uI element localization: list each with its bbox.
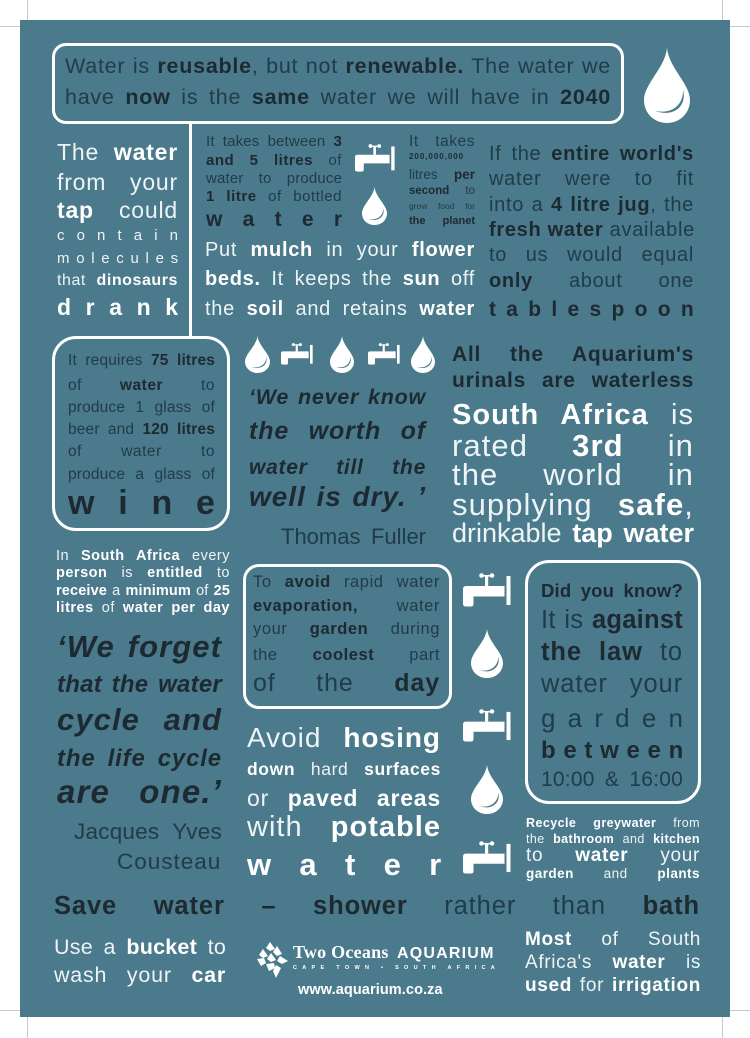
text: litres to grow food: 200,000,000 (409, 152, 464, 161)
icon: tap (463, 841, 510, 874)
quote: Jacques Yves Cousteau: Jacques Yves (74, 819, 222, 844)
text: avoid hosing (246, 722, 469, 882)
text: water dinosaurs drank: from your (57, 169, 178, 195)
text: bucket to wash car: wash your car (54, 963, 226, 987)
text: most water used for irrigation (525, 929, 701, 996)
text: water dinosaurs drank (57, 139, 193, 320)
text: South Africa rated 3rd: supplying safe, (452, 487, 694, 522)
text: waterless urinals: urinals are waterless (452, 369, 694, 392)
text: bucket to wash car: Use a bucket to (54, 935, 226, 959)
text: avoid hosing: Avoid hosing (247, 722, 441, 753)
text: beer and wine litres: wine (68, 484, 239, 522)
quote: Jacques Yves Cousteau: ‘We forget (57, 629, 222, 664)
text: logo wordmark (293, 942, 495, 962)
text: reusable not renewable: Water is reusable, but not renewable. The water we (65, 54, 611, 78)
text: water dinosaurs drank: tap could (57, 197, 178, 223)
text: did you know garden law: 10:00 & 16:00 (541, 768, 683, 791)
text: avoid evaporation: To avoid rapid water (253, 573, 440, 591)
text: bottled water litres (206, 133, 362, 231)
text: shower rather than bath: Save water – shower rather than bath (54, 892, 700, 920)
icon: tap (281, 343, 313, 365)
quote: Thomas Fuller: Thomas Fuller (281, 524, 426, 549)
text: water dinosaurs drank: drank (57, 294, 193, 320)
icon: large water drop (644, 48, 690, 123)
text: waterless urinals: All the Aquarium's (452, 343, 694, 366)
text: 4 litre jug tablespoon: tablespoon (489, 298, 704, 321)
text: entitled to 25 litres (56, 548, 230, 616)
text: bottled water litres: water to produce (206, 170, 342, 187)
text: water dinosaurs drank: The water (57, 139, 178, 165)
text: litres to grow food: grow food for (409, 201, 475, 211)
icon row: drops and taps (245, 336, 435, 373)
text: avoid hosing: or paved areas (247, 785, 441, 811)
text: bottled water litres: It takes between 3 (206, 133, 342, 150)
text: beer and wine litres: of water to (68, 377, 215, 394)
text: South Africa rated 3rd: drinkable tap water (452, 518, 694, 548)
icon: water drop (362, 187, 387, 225)
text: water dinosaurs drank: that dinosaurs (57, 272, 178, 289)
text: did you know garden law: garden (541, 703, 695, 733)
text: reusable not renewable (65, 54, 611, 109)
text: website url: www.aquarium.co.za (298, 982, 443, 998)
text: recycle greywater: garden and plants (526, 866, 700, 881)
text: avoid evaporation (253, 573, 440, 697)
text: bottled water litres: water (206, 208, 362, 231)
text: recycle greywater: to water your (526, 845, 700, 866)
text: beer and wine litres: of water to (68, 443, 215, 460)
text: avoid hosing: with potable (247, 811, 441, 843)
text: did you know garden law (541, 580, 695, 791)
text: bottled water litres: 1 litre of bottled (206, 188, 342, 205)
text: litres to grow food: litres per (409, 167, 475, 182)
text: most water used for irrigation: Most of South (525, 929, 701, 950)
text: South Africa rated 3rd: rated 3rd in (452, 428, 694, 463)
text: avoid evaporation: the coolest part (253, 646, 440, 664)
text: litres to grow food: It takes (409, 133, 475, 150)
panel: did you know box (525, 560, 701, 804)
text: 4 litre jug tablespoon: water were to fit (489, 168, 694, 190)
text: mulch flower beds: beds. It keeps the sun off (205, 268, 475, 290)
text: South Africa rated 3rd (452, 399, 694, 548)
text: waterless urinals (452, 343, 694, 392)
text: entitled to 25 litres: litres of water per day (56, 600, 230, 616)
quote: Jacques Yves Cousteau: cycle and (57, 702, 222, 737)
icon: water drop (471, 629, 503, 678)
icon: drop (411, 336, 435, 373)
text: avoid hosing: water (247, 847, 469, 882)
logo: Two Oceans Aquarium (257, 942, 500, 998)
text: entitled to 25 litres: In South Africa every (56, 548, 230, 564)
text: beer and wine litres: It requires 75 litres (68, 352, 215, 369)
quote: Thomas Fuller: the worth of (249, 417, 426, 445)
text: South Africa rated 3rd: the world in (452, 457, 694, 492)
text: litres to grow food (409, 133, 475, 227)
text: recycle greywater: the bathroom and kitchen (526, 832, 700, 846)
text: 4 litre jug tablespoon: If the entire world's (489, 143, 694, 165)
text: litres to grow food: the planet (409, 215, 475, 227)
text: most water used for irrigation: used for irrigation (525, 975, 701, 996)
text: 4 litre jug tablespoon (489, 143, 704, 321)
text: avoid evaporation: of the day (253, 669, 440, 697)
text: beer and wine litres: produce a glass of (68, 466, 215, 483)
text: did you know garden law: Did you know? (541, 580, 683, 601)
text: did you know garden law: the law to (541, 638, 683, 666)
icon: drop (330, 336, 354, 373)
icon: tap (463, 709, 510, 742)
panel: beer and wine box (52, 336, 230, 531)
text: mulch flower beds (205, 239, 475, 320)
text: recycle greywater: Recycle greywater from (526, 816, 700, 830)
text: most water used for irrigation: Africa's water is (525, 952, 701, 973)
text: mulch flower beds: Put mulch in your flower (205, 239, 475, 261)
text: water dinosaurs drank: contain (57, 227, 190, 244)
quote: Jacques Yves Cousteau: are one.’ (57, 773, 222, 810)
quote: Thomas Fuller (249, 385, 428, 549)
text: water dinosaurs drank: molecules (57, 250, 185, 267)
text: 4 litre jug tablespoon: into a 4 litre jug, the (489, 194, 694, 216)
quote: Thomas Fuller: water till the (249, 456, 426, 479)
text: avoid hosing: down hard surfaces (247, 759, 441, 779)
text: did you know garden law: between (541, 737, 691, 764)
text: beer and wine litres: beer and 120 litres (68, 421, 215, 438)
quote: Jacques Yves Cousteau (57, 629, 223, 874)
text: logo wordmark: AQUARIUM (397, 945, 495, 962)
icon: drop (245, 336, 270, 373)
icon: tap (355, 144, 395, 172)
quote: Jacques Yves Cousteau: the life cycle (57, 745, 222, 772)
vertical divider line (189, 123, 192, 337)
text: bucket to wash car (54, 935, 226, 987)
text: reusable not renewable: have now is the same water we will have in 2040 (65, 85, 611, 109)
text: entitled to 25 litres: person is entitled to (56, 565, 230, 581)
text: 4 litre jug tablespoon: only about one (489, 270, 694, 292)
text: bottled water litres: and 5 litres of (206, 152, 342, 169)
text: did you know garden law: It is against (541, 606, 683, 634)
text: recycle greywater (526, 816, 700, 881)
quote: Thomas Fuller: ‘We never know (249, 385, 426, 409)
text: litres to grow food: second to (409, 185, 475, 197)
text: logo wordmark: Two Oceans (293, 942, 389, 962)
text: South Africa rated 3rd: South Africa is (452, 399, 694, 431)
text: mulch flower beds: the soil and retains water (205, 298, 475, 320)
text: avoid evaporation: evaporation, water (253, 597, 440, 615)
text: 4 litre jug tablespoon: to us would equal (489, 244, 694, 266)
icon: tap (368, 343, 400, 365)
panel: evaporation box (243, 564, 452, 709)
text: 4 litre jug tablespoon: fresh water available (489, 219, 695, 241)
icon: water drop (471, 765, 503, 814)
text: logo tagline: CAPE TOWN • SOUTH AFRICA (293, 965, 500, 971)
icon: tap (463, 573, 510, 606)
quote: Thomas Fuller: well is dry. ’ (249, 481, 426, 512)
quote: Jacques Yves Cousteau: that the water (57, 671, 222, 698)
text: did you know garden law: water your (541, 670, 683, 698)
text: entitled to 25 litres: receive a minimum of 25 (56, 583, 230, 599)
panel: reusable not renewable callout box (52, 43, 624, 124)
text: beer and wine litres (68, 352, 239, 522)
icon: fish school (257, 942, 288, 978)
text: beer and wine litres: produce 1 glass of (68, 399, 215, 416)
text: avoid evaporation: your garden during (253, 620, 440, 638)
quote: Jacques Yves Cousteau: Cousteau (117, 849, 221, 874)
